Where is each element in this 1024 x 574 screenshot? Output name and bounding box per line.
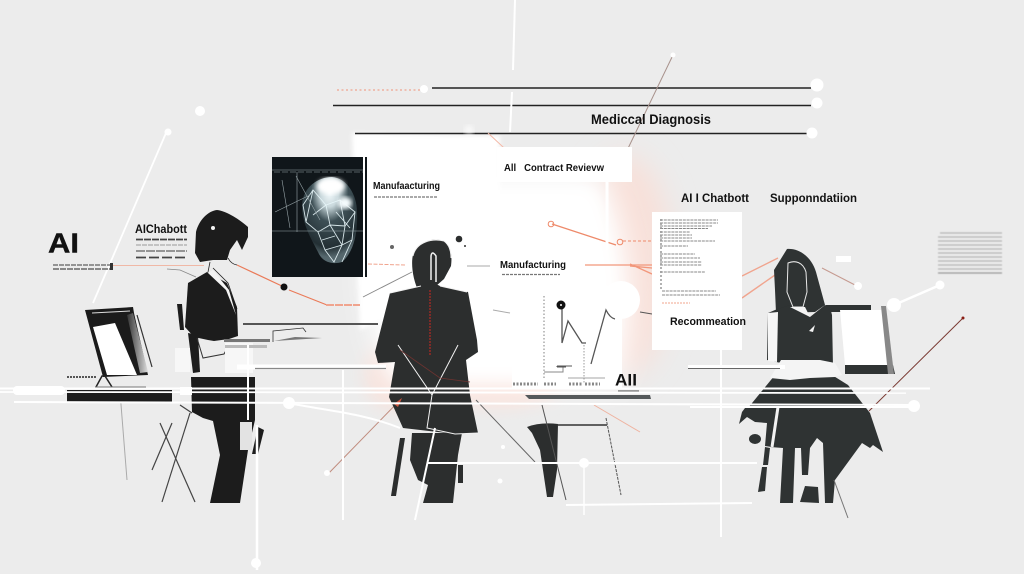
top timeline lines (333, 78, 824, 138)
icon: laptop left (67, 307, 152, 480)
centre table (525, 390, 651, 399)
small text rule left (53, 263, 204, 277)
orange connectors (237, 221, 964, 476)
skull hologram (302, 177, 357, 263)
text block: AI chatbot left (135, 222, 187, 258)
figure: standing woman (175, 210, 264, 503)
white crossing lines (0, 182, 930, 570)
desk left (67, 390, 172, 402)
vertical white strokes and connectors (93, 0, 676, 303)
woman details (768, 262, 894, 518)
figure: seated woman right (739, 249, 895, 503)
central glow (352, 133, 673, 410)
heading: AI chatbot and support: AI I Chatbott (681, 193, 749, 205)
icon: stool left (152, 405, 195, 502)
label: AI chart: AII (615, 370, 637, 390)
figure: seated person centre (375, 240, 478, 503)
text block: AI chatbot left: AIChabott (135, 222, 187, 236)
figure details centre (390, 240, 478, 520)
heading: AI: AI (48, 228, 79, 258)
label: AI Contract Review: All Contract Revievw (504, 162, 605, 174)
panel: medical scan (272, 157, 367, 277)
panel: recommendation document (652, 212, 746, 350)
panel: line chart (512, 281, 640, 390)
pedestal (527, 405, 621, 500)
heading: medical diagnosis: Mediccal Diagnosis (591, 112, 711, 127)
panel: AI contract review (497, 147, 632, 182)
desk with keyboard (224, 324, 386, 368)
white connector right (836, 256, 944, 312)
label: manufacturing upper: Manufaacturing (373, 180, 440, 192)
label: manufacturing lower: Manufacturing (500, 259, 566, 271)
faded data block (938, 233, 1002, 273)
skirt (748, 375, 883, 503)
label: manufacturing upper (373, 180, 440, 197)
label: recommendation: Recommeation (670, 316, 746, 328)
heading: AI chatbot and support: Supponndatiion (770, 193, 857, 205)
heading: AI chatbot and support (681, 193, 857, 205)
